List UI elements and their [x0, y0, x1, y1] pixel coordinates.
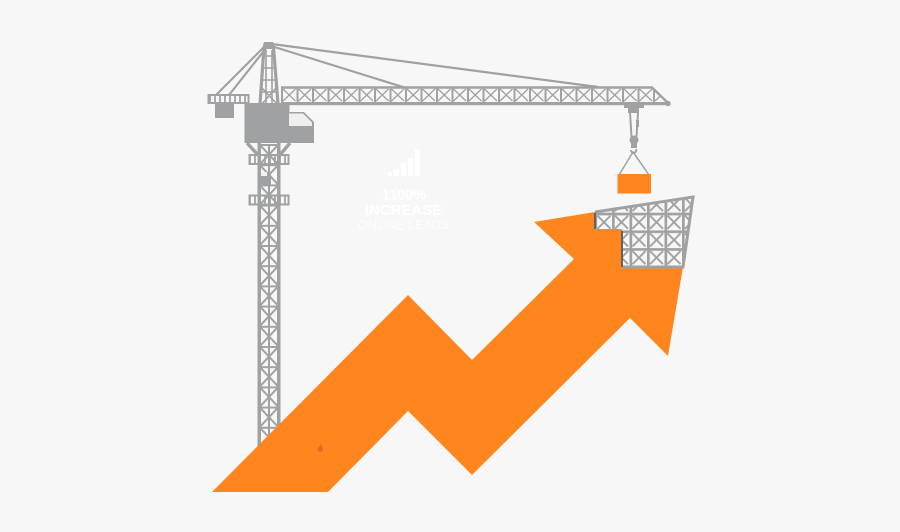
- hook and cables: [619, 103, 649, 175]
- stat text: ONLINE LEADS: [358, 218, 449, 232]
- lattice arrowhead under construction: [590, 195, 696, 270]
- tower braces: [247, 143, 290, 156]
- tower platforms: [250, 155, 288, 204]
- stat block: [358, 149, 449, 232]
- growth arrow: [212, 212, 683, 492]
- crane mast: [260, 42, 278, 104]
- stat text: 1100%: [382, 188, 426, 204]
- jib truss: [281, 88, 671, 106]
- crane: [208, 42, 671, 454]
- counter jib: [208, 95, 248, 118]
- stat text: INCREASE: [365, 202, 442, 219]
- orange load: [618, 174, 651, 194]
- crane tower: [258, 143, 280, 454]
- infographic: crane lifting growth arrow: [208, 42, 695, 492]
- tower small box: [259, 172, 271, 186]
- stay cables: [216, 44, 598, 95]
- stat text: [358, 188, 449, 232]
- crane cab: [244, 103, 314, 143]
- icon: signal bars: [388, 149, 420, 176]
- small flame mark: [317, 444, 323, 452]
